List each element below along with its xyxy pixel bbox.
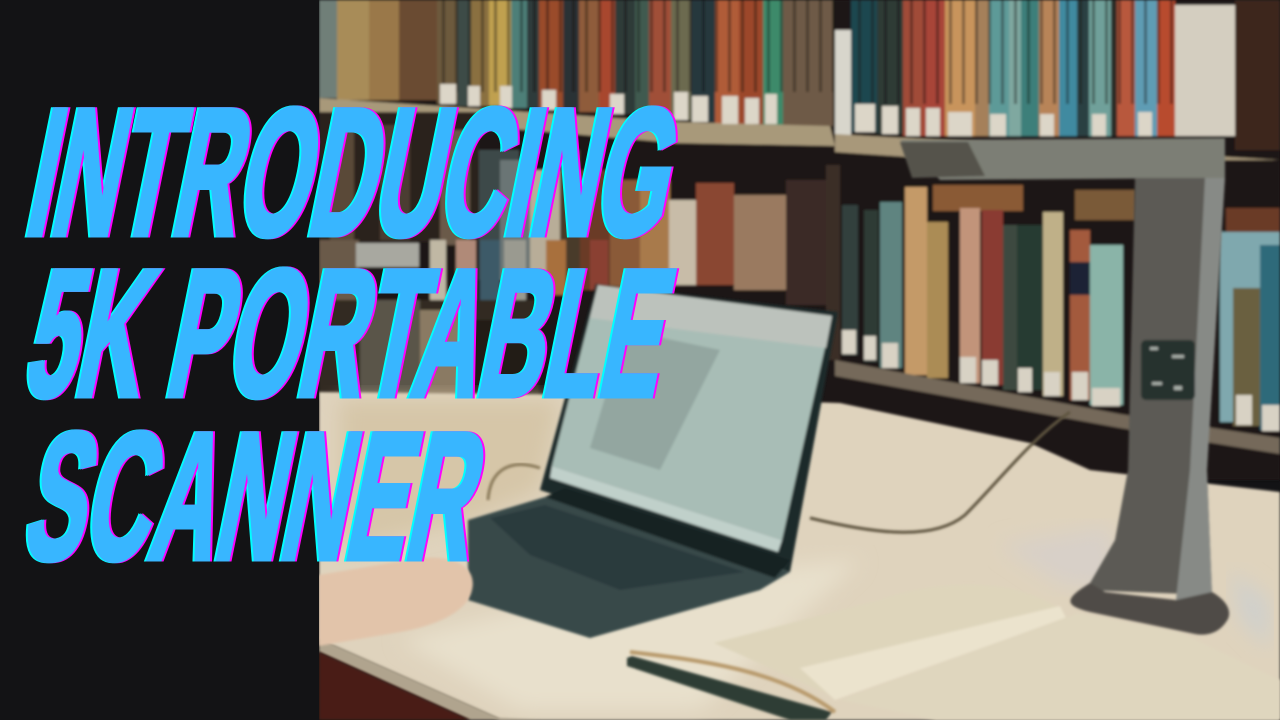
open book: [627, 585, 1280, 720]
title: Introducing 5K Portable Scanner: [10, 71, 698, 598]
laptop keyboard: [468, 497, 790, 638]
middle-left books: [319, 112, 840, 400]
left dark panel: [0, 0, 319, 720]
title line 3: SCANNER: [14, 395, 503, 598]
top-left books: [319, 0, 833, 126]
scanner head: [900, 138, 1225, 180]
top-right books: [835, 0, 1280, 150]
desk surface: [319, 392, 1280, 720]
laptop screen: [540, 284, 838, 572]
scanner base: [1070, 583, 1229, 635]
title line 2: [12, 232, 691, 435]
pen: [627, 656, 832, 720]
lower shelf board: [835, 360, 1280, 454]
scanner arm: [1086, 178, 1225, 595]
laptop: [468, 284, 838, 638]
scanner buttons: [1141, 340, 1195, 400]
bookshelves background: [319, 0, 1280, 480]
desk wood edge: [319, 638, 540, 720]
top shelf boards: [319, 98, 835, 146]
book page edge: [630, 652, 835, 712]
scanner: [900, 138, 1229, 635]
title line 3: [10, 395, 503, 598]
photo: library desk with laptop and scanner: [319, 0, 1280, 720]
title line 3: SCANNER: [12, 395, 501, 598]
page-end labels: [440, 84, 1152, 136]
title line 3: SCANNER: [10, 395, 499, 598]
cable: [810, 412, 1070, 532]
hand: [319, 557, 473, 646]
middle-right books: [840, 160, 1280, 431]
title line 1: [12, 71, 698, 274]
